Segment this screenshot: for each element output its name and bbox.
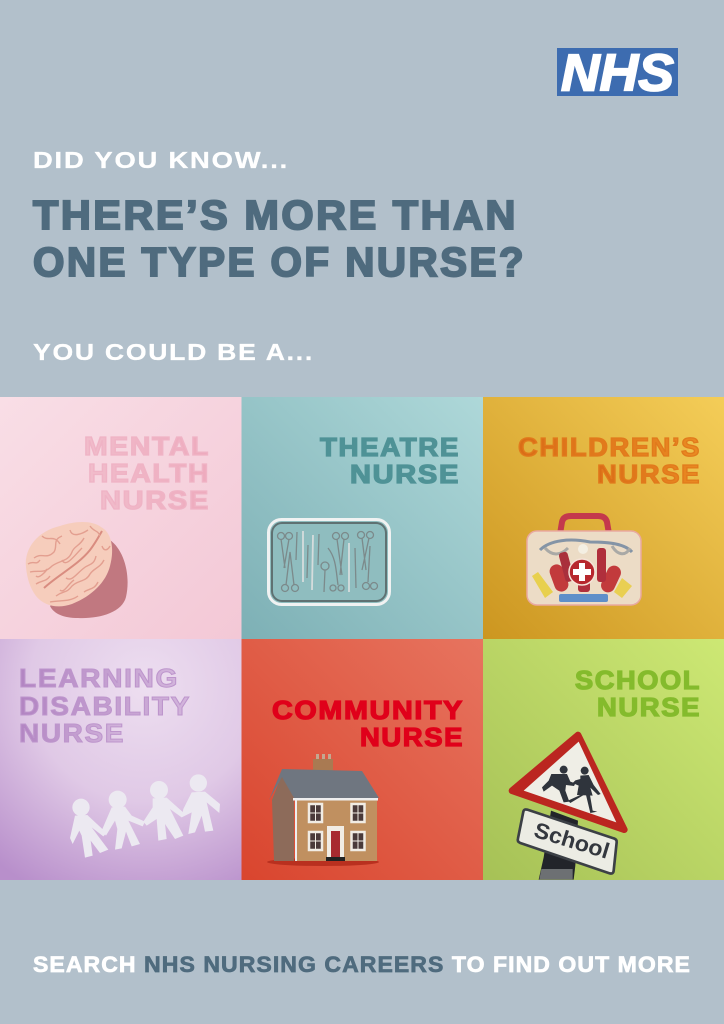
- label: community nurse: COMMUNITY: [272, 695, 464, 725]
- label: learning disability nurse: LEARNING: [19, 663, 179, 693]
- icon: school road sign: [512, 735, 624, 880]
- label: theatre nurse: THEATRE: [320, 432, 460, 462]
- panel: children's nurse: [483, 397, 724, 639]
- icon: house: [267, 754, 379, 866]
- label: mental health nurse: HEALTH: [88, 458, 210, 488]
- label: children's nurse: NURSE: [597, 459, 701, 489]
- label: school nurse: SCHOOL: [575, 665, 701, 695]
- icon: school road sign: School: [531, 817, 612, 864]
- label: children's nurse: CHILDREN’S: [518, 432, 701, 462]
- label: community nurse: [272, 695, 464, 752]
- label: mental health nurse: NURSE: [100, 485, 210, 515]
- icon: brain: [26, 522, 128, 618]
- label: mental health nurse: MENTAL: [84, 431, 210, 461]
- main heading: THERE’S MORE THAN: [33, 192, 518, 238]
- label: learning disability nurse: [19, 663, 191, 748]
- label: learning disability nurse: NURSE: [19, 718, 125, 748]
- panel: school nurse: [483, 639, 724, 880]
- label: theatre nurse: NURSE: [350, 459, 460, 489]
- main heading: [33, 192, 526, 285]
- main heading: ONE TYPE OF NURSE?: [33, 239, 526, 285]
- label: school nurse: [575, 665, 701, 722]
- label: school nurse: NURSE: [597, 692, 701, 722]
- intro line: DID YOU KNOW...: [33, 147, 289, 173]
- label: children's nurse: [518, 432, 701, 489]
- label: mental health nurse: [84, 431, 210, 515]
- panel: theatre nurse: [242, 397, 483, 639]
- panel: community nurse: [242, 639, 483, 880]
- footer call to action: SEARCH NHS NURSING CAREERS TO FIND OUT MORE: [33, 952, 691, 977]
- NHS logo: NHS: [561, 44, 674, 102]
- label: theatre nurse: [320, 432, 460, 489]
- icon: paper people chain: [70, 774, 220, 858]
- icon: toy medical kit: [527, 516, 641, 605]
- label: learning disability nurse: DISABILITY: [19, 691, 191, 721]
- label: community nurse: NURSE: [360, 722, 464, 752]
- panel: learning disability nurse: [0, 639, 242, 880]
- panel: mental health nurse: [0, 397, 242, 639]
- sub heading: YOU COULD BE A...: [33, 339, 314, 365]
- icon: surgical tray: [268, 520, 390, 604]
